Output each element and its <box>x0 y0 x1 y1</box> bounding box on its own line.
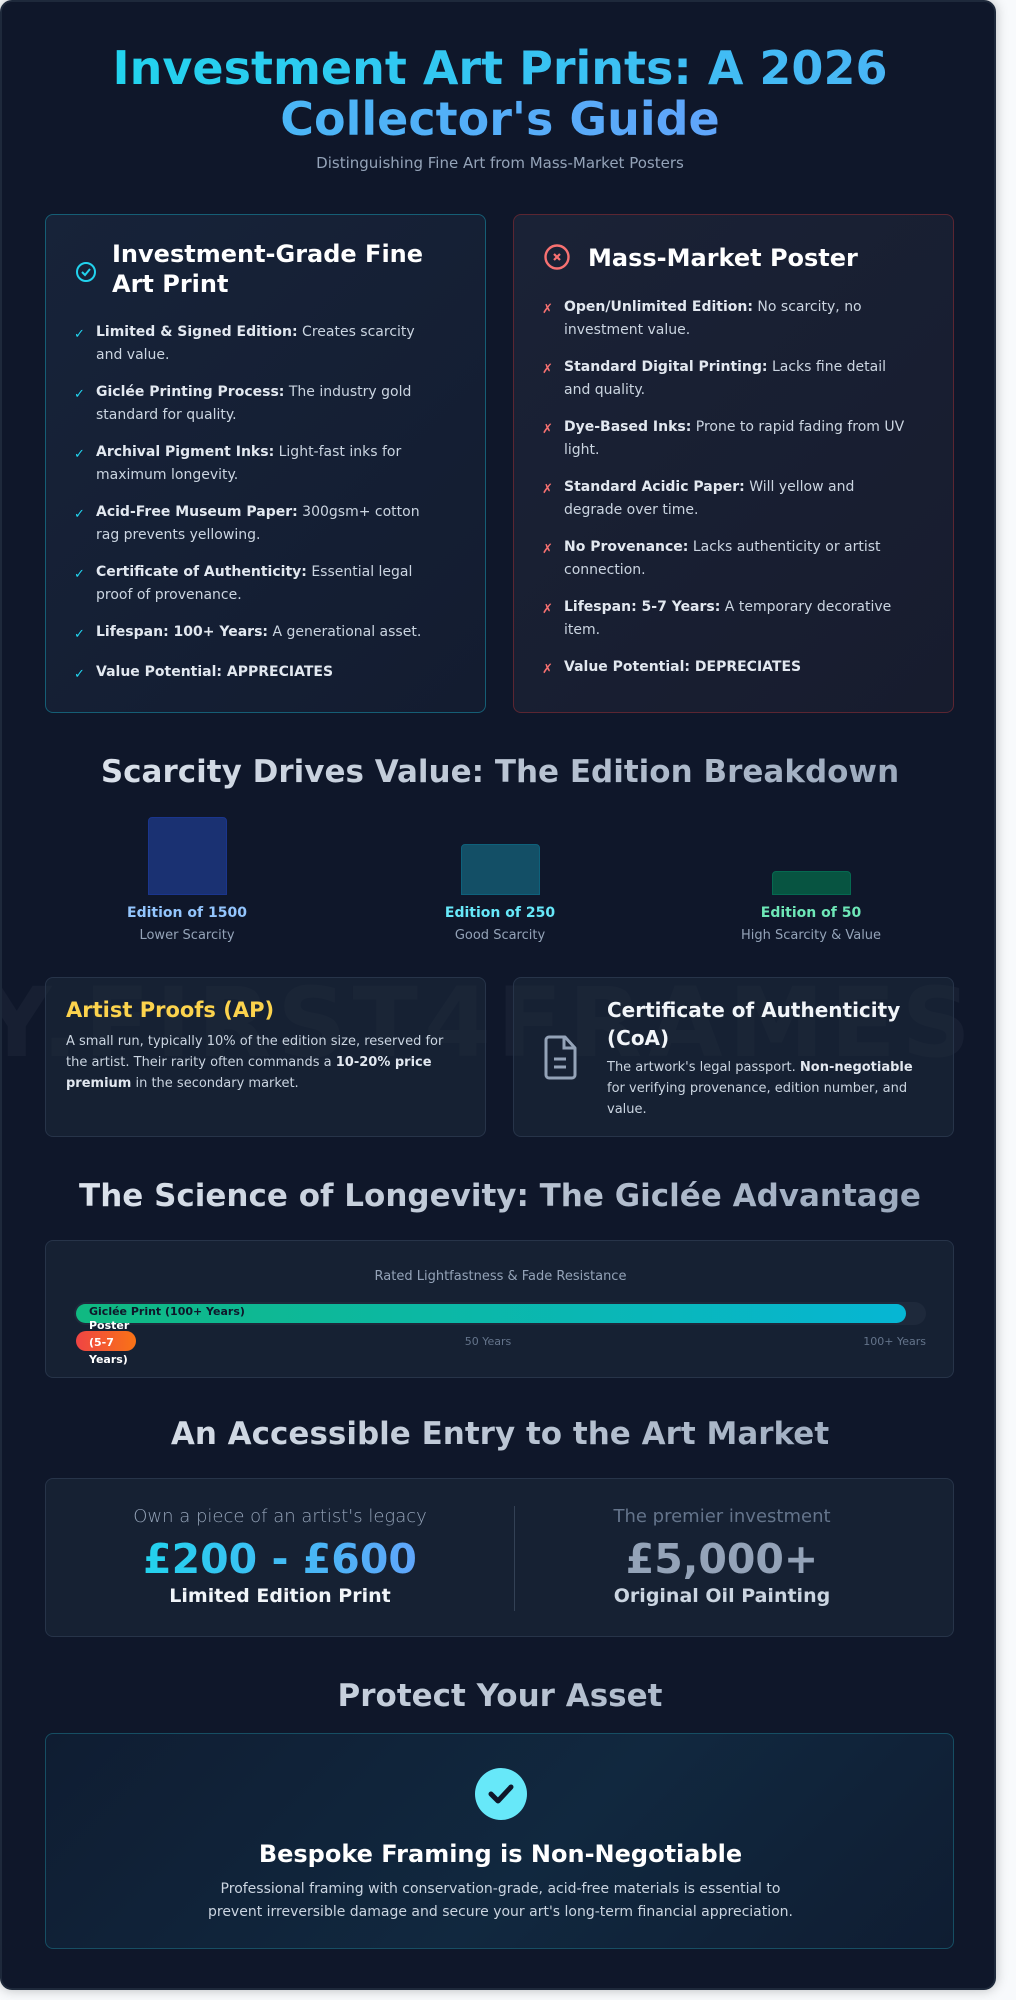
list: Value Potential: APPRECIATES <box>96 664 333 680</box>
bar chart: editions: Edition of 1500 <box>127 905 247 921</box>
list: Acid-Free Museum Paper: 300gsm+ cotton rag prevents yellowing. <box>96 504 420 543</box>
card: certificate <box>513 977 954 1137</box>
bar chart: editions: High Scarcity & Value <box>741 928 881 943</box>
panel: pricing: The premier investment <box>613 1506 831 1527</box>
card: artist proofs: A small run, typically 10% of the edition size, reserved for the artist. Their rarity often commands a 10-20% price premium in the secondary market. <box>66 1034 443 1091</box>
icon: check badge <box>475 1768 527 1820</box>
list: Value Potential: DEPRECIATES <box>564 659 801 675</box>
panel: mass-market <box>513 214 954 713</box>
panel: investment-grade: ✓ <box>74 627 85 642</box>
panel: lightfastness chart: Giclée Print (100+ Years) <box>89 1305 245 1318</box>
list: Certificate of Authenticity: Essential legal proof of provenance. <box>96 564 412 603</box>
subtitle: Distinguishing Fine Art from Mass-Market Posters <box>316 154 684 172</box>
list <box>542 299 904 677</box>
heading: longevity: The Science of Longevity: The Giclée Advantage <box>79 1178 921 1214</box>
list: Dye-Based Inks: Prone to rapid fading from UV light. <box>564 419 904 458</box>
panel: pricing: Limited Edition Print <box>169 1585 391 1607</box>
heading: scarcity: Scarcity Drives Value: The Edition Breakdown <box>101 754 899 790</box>
bar chart: editions: Edition of 250 <box>445 905 555 921</box>
list: Limited & Signed Edition: Creates scarcity and value. <box>96 324 415 363</box>
panel: mass-market: ✗ <box>542 422 553 437</box>
panel: mass-market: ✗ <box>542 482 553 497</box>
heading: Mass-Market Poster <box>588 244 858 272</box>
list: Lifespan: 5-7 Years: A temporary decorative item. <box>564 599 891 638</box>
list: Standard Acidic Paper: Will yellow and degrade over time. <box>564 479 854 518</box>
card: artist proofs: Artist Proofs (AP) <box>66 998 274 1022</box>
panel: investment-grade: ✓ <box>74 447 85 462</box>
list <box>74 324 421 682</box>
panel: pricing: £5,000+ <box>626 1535 818 1583</box>
icon: x circle <box>544 244 570 270</box>
list: Open/Unlimited Edition: No scarcity, no investment value. <box>564 299 862 338</box>
panel: framing <box>45 1733 954 1949</box>
bar chart: editions <box>127 817 881 943</box>
panel: pricing <box>45 1478 954 1637</box>
panel: lightfastness chart: Rated Lightfastness & Fade Resistance <box>375 1269 626 1284</box>
panel: pricing: Original Oil Painting <box>614 1585 830 1607</box>
bar chart: editions: Lower Scarcity <box>139 928 235 943</box>
watermark: Y.FIRST4FRAMES <box>0 967 977 1079</box>
heading: entry: An Accessible Entry to the Art Market <box>171 1416 829 1452</box>
list: Giclée Printing Process: The industry gold standard for quality. <box>96 384 411 423</box>
panel: pricing: £200 - £600 <box>143 1535 417 1583</box>
panel: investment-grade: ✓ <box>74 567 85 582</box>
bar chart: editions: Good Scarcity <box>455 928 545 943</box>
list: Standard Digital Printing: Lacks fine detail and quality. <box>564 359 886 398</box>
title <box>113 41 887 146</box>
panel: lightfastness chart <box>45 1240 954 1378</box>
panel: investment-grade: ✓ <box>74 667 85 682</box>
card: certificate: Certificate of Authenticity (CoA) <box>607 998 900 1050</box>
heading: Investment-Grade Fine Art Print <box>112 240 423 298</box>
list: Archival Pigment Inks: Light-fast inks for maximum longevity. <box>96 444 401 483</box>
panel: mass-market: ✗ <box>542 302 553 317</box>
card: artist proofs <box>45 977 486 1137</box>
panel: investment-grade: ✓ <box>74 387 85 402</box>
heading: protect <box>2 1678 998 1714</box>
heading: entry <box>2 1416 998 1452</box>
card: certificate: The artwork's legal passport. Non-negotiable for verifying provenance, edition number, and value. <box>607 1060 913 1117</box>
panel: investment-grade: ✓ <box>74 507 85 522</box>
panel: mass-market: ✗ <box>542 662 553 677</box>
panel: framing: Professional framing with conservation-grade, acid-free materials is essential to prevent irreversible damage and secure your art's long-term financial appreciation. <box>208 1881 793 1920</box>
title: Collector's Guide <box>280 92 720 146</box>
panel: lightfastness chart: 50 Years <box>465 1335 511 1348</box>
panel: investment-grade: ✓ <box>74 327 85 342</box>
panel: lightfastness chart: Poster (5-7 Years) <box>89 1319 129 1366</box>
list: No Provenance: Lacks authenticity or artist connection. <box>564 539 881 578</box>
panel: framing: Bespoke Framing is Non-Negotiable <box>259 1840 742 1868</box>
panel: pricing: Own a piece of an artist's legacy <box>133 1506 427 1527</box>
heading: protect: Protect Your Asset <box>338 1678 662 1714</box>
panel: lightfastness chart: 100+ Years <box>863 1335 926 1348</box>
panel: mass-market: ✗ <box>542 362 553 377</box>
icon: check circle <box>76 262 96 282</box>
panel: investment-grade <box>45 214 486 713</box>
bar chart: editions: Edition of 50 <box>761 905 861 921</box>
icon: document <box>544 1036 576 1080</box>
list: Lifespan: 100+ Years: A generational asset. <box>96 624 421 640</box>
panel: mass-market: ✗ <box>542 542 553 557</box>
panel: mass-market: ✗ <box>542 602 553 617</box>
title: Investment Art Prints: A 2026 <box>113 41 887 95</box>
